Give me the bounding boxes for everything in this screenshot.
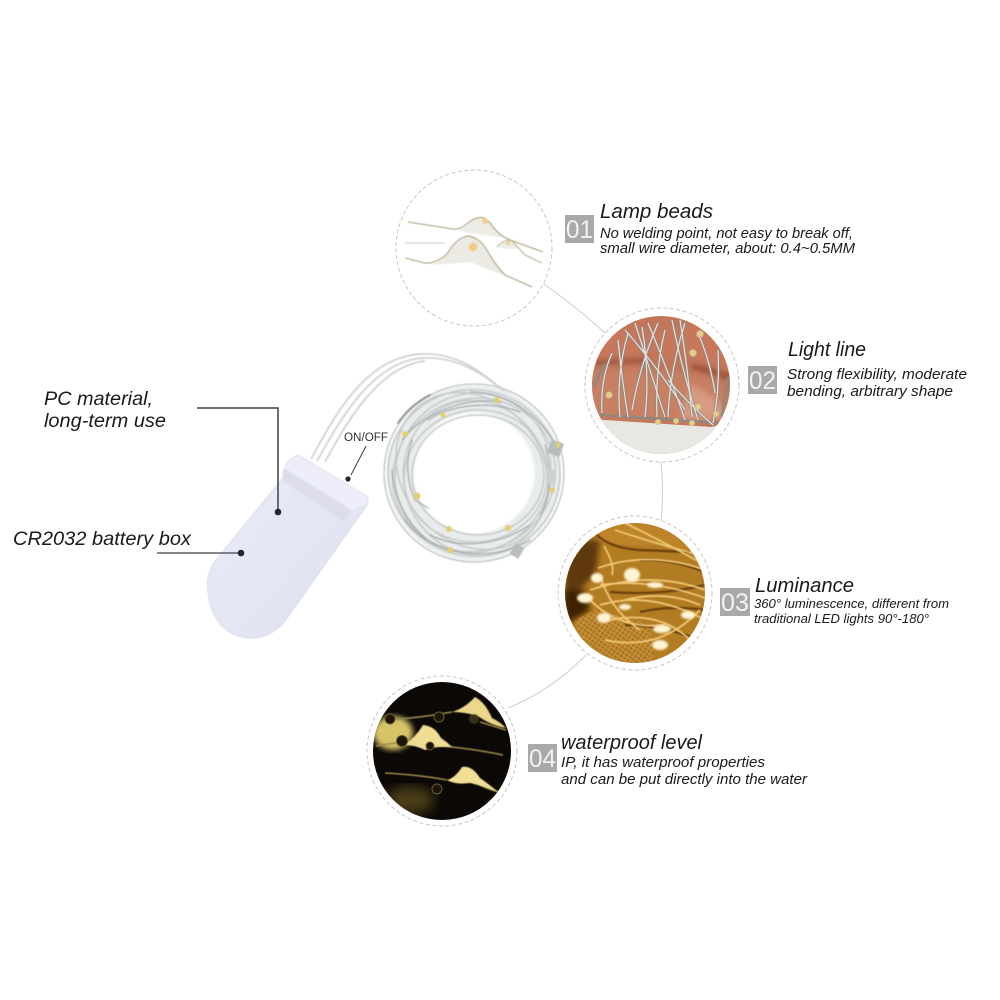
dark left background bbox=[565, 540, 600, 615]
dark strand shadows bbox=[597, 535, 705, 640]
upper band bbox=[598, 523, 696, 558]
badge 01 bbox=[565, 215, 594, 243]
panel 03: heading and text bbox=[720, 574, 949, 626]
leader dot bbox=[345, 476, 351, 482]
dashed ring bbox=[396, 170, 552, 326]
dashed ring bbox=[585, 308, 739, 462]
photo: wire wrapped around fingers bbox=[590, 314, 734, 456]
heading: Luminance bbox=[755, 574, 854, 597]
description line 1: No welding point, not easy to break off, bbox=[600, 226, 853, 242]
battery box body bbox=[207, 455, 368, 638]
badge 04 bbox=[528, 744, 557, 772]
coil dark highlight arc bbox=[398, 395, 430, 423]
label: long-term use: long-term use bbox=[44, 411, 166, 432]
dashed ring bbox=[367, 676, 517, 826]
coil connectors bbox=[510, 439, 564, 559]
panel 04: waterproof circle bbox=[367, 676, 517, 826]
description line 1: Strong flexibility, moderate bbox=[787, 366, 967, 383]
callout: CR2032 battery box bbox=[13, 529, 244, 556]
badge 03 bbox=[720, 588, 750, 616]
product: battery box and wire bbox=[207, 354, 580, 638]
description line 2: and can be put directly into the water bbox=[561, 772, 808, 788]
callout: PC material bbox=[44, 389, 281, 515]
leader line bbox=[157, 552, 241, 554]
battery box top tab bbox=[285, 456, 368, 510]
badge number: 03 bbox=[721, 589, 749, 617]
label: on/off: ON/OFF bbox=[344, 432, 388, 444]
description line 1: IP, it has waterproof properties bbox=[561, 755, 765, 771]
leader dot bbox=[275, 509, 281, 515]
LED coil bbox=[364, 362, 580, 582]
panel 02: light line circle bbox=[585, 308, 739, 462]
burlap cloth bbox=[575, 610, 655, 665]
panel 01: lamp beads circle bbox=[396, 170, 552, 326]
label: battery box: CR2032 battery box bbox=[13, 529, 193, 550]
description line 1: 360° luminescence, different from bbox=[754, 596, 949, 611]
badge number: 04 bbox=[529, 745, 556, 773]
badge number: 02 bbox=[749, 367, 776, 395]
battery box lid groove bbox=[283, 468, 352, 522]
description line 2: bending, arbitrary shape bbox=[787, 383, 953, 400]
panel 04: heading and text bbox=[528, 731, 808, 788]
leader dot bbox=[238, 550, 244, 556]
label: PC material: PC material, bbox=[44, 389, 153, 410]
photo: lamp beads close up bbox=[405, 217, 543, 287]
description line 2: small wire diameter, about: 0.4~0.5MM bbox=[600, 241, 856, 257]
callout: on/off switch bbox=[344, 432, 388, 482]
dashed ring bbox=[558, 516, 712, 670]
panel 01: heading and text bbox=[565, 200, 856, 257]
heading: Lamp beads bbox=[600, 200, 713, 223]
description line 2: traditional LED lights 90°-180° bbox=[754, 611, 929, 626]
photo: warm glowing wires bbox=[565, 523, 705, 665]
photo: beads with water droplets on black bbox=[370, 680, 514, 824]
connector lines between circles bbox=[508, 284, 662, 708]
leader line bbox=[351, 446, 366, 475]
badge number: 01 bbox=[566, 216, 593, 244]
white surface under the hand bbox=[602, 420, 716, 454]
LED beads on coil bbox=[402, 397, 560, 553]
leader line bbox=[197, 408, 278, 512]
transparent wires from box to coil bbox=[311, 354, 510, 462]
coil soft underlay bbox=[400, 399, 548, 547]
panel 02: heading and text bbox=[748, 338, 967, 400]
panel 03: luminance circle bbox=[558, 516, 712, 670]
heading: waterproof level bbox=[561, 731, 703, 754]
heading: Light line bbox=[788, 338, 866, 361]
badge 02 bbox=[748, 366, 777, 394]
